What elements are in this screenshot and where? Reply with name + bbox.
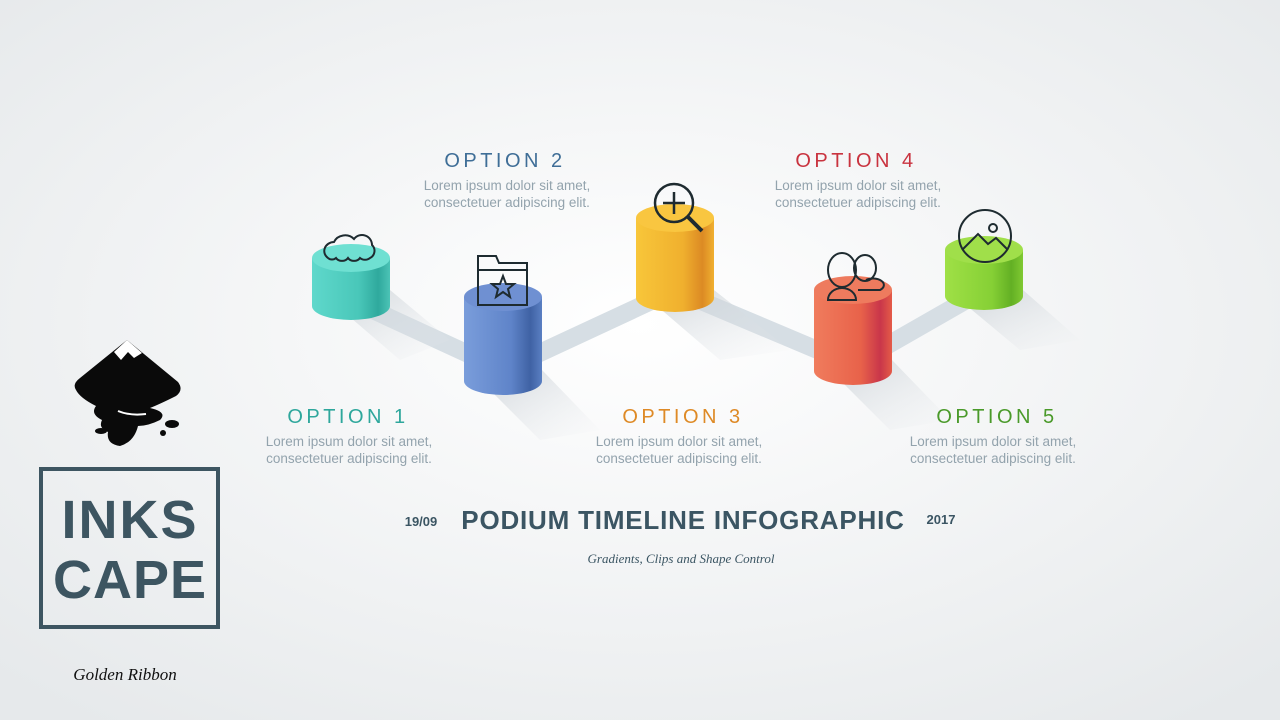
option 2 text: consectetuer adipiscing elit. [424, 195, 590, 210]
podium 3 yellow [636, 184, 714, 312]
podium shadows [330, 290, 1080, 440]
icon: landscape [959, 210, 1011, 262]
icon: users [828, 253, 884, 300]
option 1 text: OPTION 1 [287, 406, 409, 428]
podium 1 teal [312, 235, 390, 320]
option 3 text: OPTION 3 [622, 406, 744, 428]
option 3 text [596, 406, 762, 466]
option 4 text [775, 150, 941, 210]
option 3 text: consectetuer adipiscing elit. [596, 451, 762, 466]
inkscape wordmark box: CAPE [53, 550, 207, 610]
signature: Golden Ribbon [73, 665, 177, 684]
podium 4 red [814, 253, 892, 385]
connector path [351, 290, 984, 370]
option 5 text [910, 406, 1076, 466]
inkscape wordmark box: INKS [61, 490, 199, 550]
option 4 text: OPTION 4 [795, 150, 917, 172]
option 5 text: OPTION 5 [936, 406, 1058, 428]
icon: cloud [324, 235, 374, 261]
title: 19/09 [405, 514, 437, 529]
option 1 text [266, 406, 432, 466]
icon: folder star [478, 256, 527, 305]
option 2 text [424, 150, 590, 210]
option 4 text: Lorem ipsum dolor sit amet, [775, 178, 941, 193]
option 4 text: consectetuer adipiscing elit. [775, 195, 941, 210]
option 3 text: Lorem ipsum dolor sit amet, [596, 434, 762, 449]
option 5 text: consectetuer adipiscing elit. [910, 451, 1076, 466]
podium 2 blue [464, 256, 542, 395]
title: 2017 [927, 512, 955, 527]
podium 5 green [945, 210, 1023, 310]
icon: magnifier [655, 184, 702, 231]
inkscape logo icon [75, 340, 181, 446]
option 1 text: consectetuer adipiscing elit. [266, 451, 432, 466]
inkscape wordmark box [41, 469, 218, 627]
subtitle: Gradients, Clips and Shape Control [588, 551, 775, 566]
option 2 text: OPTION 2 [444, 150, 566, 172]
option 2 text: Lorem ipsum dolor sit amet, [424, 178, 590, 193]
option 5 text: Lorem ipsum dolor sit amet, [910, 434, 1076, 449]
title: PODIUM TIMELINE INFOGRAPHIC [461, 505, 905, 535]
option 1 text: Lorem ipsum dolor sit amet, [266, 434, 432, 449]
